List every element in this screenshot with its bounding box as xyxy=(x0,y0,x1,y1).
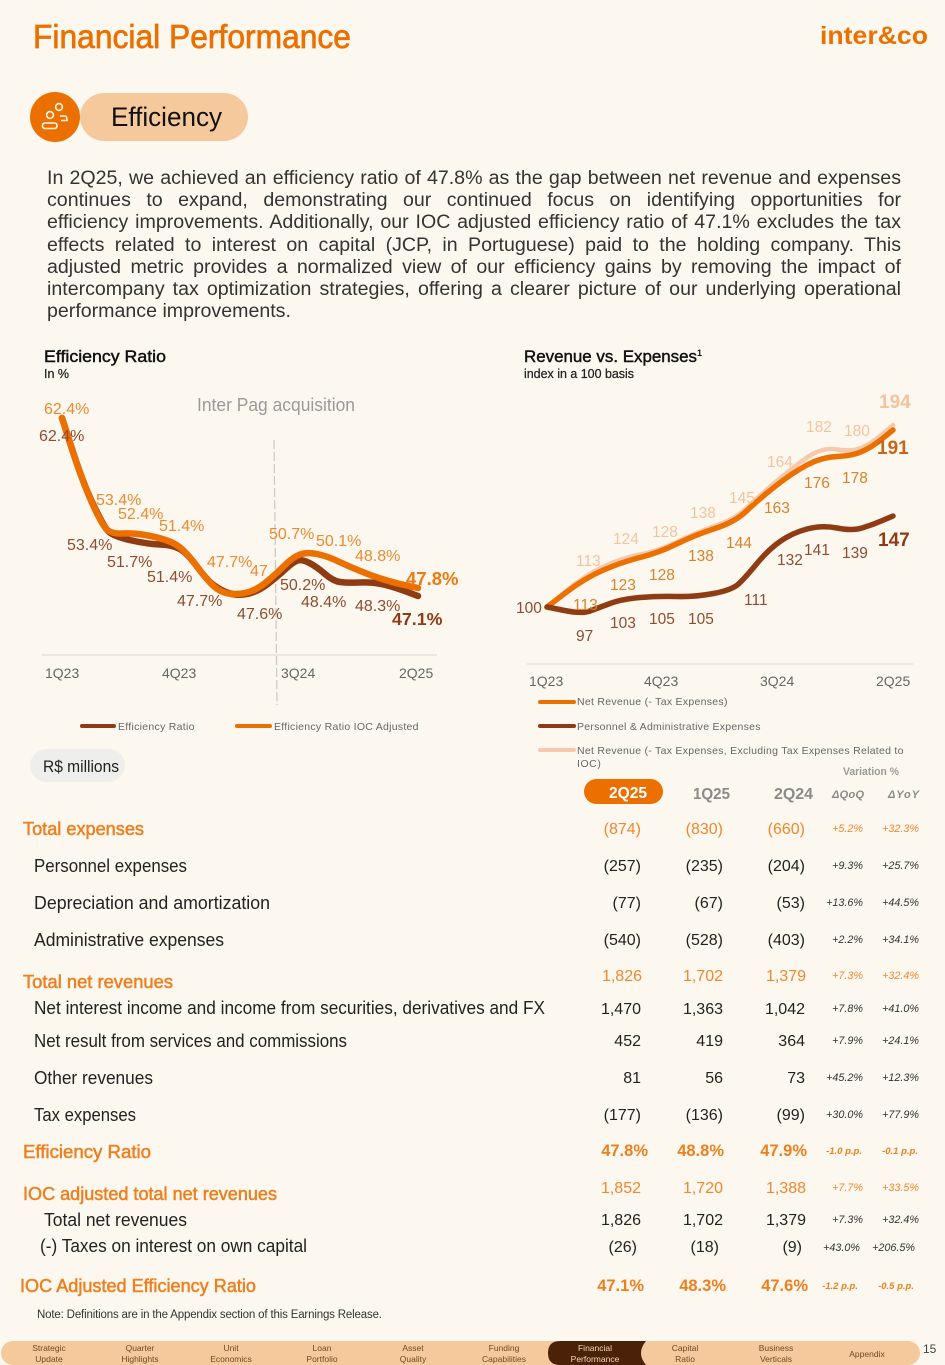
panel: revenue vs expenses chart xyxy=(516,347,913,770)
row: depreciation and amortization xyxy=(34,893,919,913)
data labels: IOC adjusted xyxy=(44,401,458,589)
legend: Efficiency Ratio IOC Adjusted xyxy=(274,721,419,733)
navigation bar: Capabilities xyxy=(482,1354,526,1364)
page number: 15 xyxy=(923,1342,937,1356)
legend xyxy=(540,696,904,770)
data labels: net revenue excluding IOC tax: 124 xyxy=(613,531,639,548)
row: total expenses: (660) xyxy=(768,821,805,838)
data labels: efficiency ratio: 48.3% xyxy=(355,598,400,615)
row: efficiency ratio: -1.0 p.p. xyxy=(826,1146,862,1157)
row: net result from services: +24.1% xyxy=(882,1035,919,1047)
row: administrative expenses xyxy=(34,930,919,950)
line: net revenue excluding IOC tax xyxy=(547,425,893,607)
row: IOC adjusted total net revenues: 1,852 xyxy=(601,1180,641,1197)
data labels: expenses: 100 xyxy=(516,600,542,617)
row: other revenues: 56 xyxy=(705,1070,723,1087)
x axis labels: 1Q23 xyxy=(529,673,563,689)
data labels: efficiency ratio: 48.4% xyxy=(301,594,346,611)
table: financial rows xyxy=(20,819,919,1296)
intro paragraph xyxy=(47,167,901,322)
row: personnel expenses xyxy=(34,856,919,876)
data labels: efficiency ratio: 51.7% xyxy=(107,554,152,571)
row: IOC adjusted efficiency ratio: 48.3% xyxy=(679,1277,726,1295)
intro paragraph: intercompany tax optimization strategies, offering a clearer picture of our underlying operational xyxy=(47,278,901,300)
row: administrative expenses: (540) xyxy=(604,932,641,949)
row: personnel expenses: (235) xyxy=(686,858,723,875)
row: net result from services xyxy=(34,1031,919,1051)
row: total expenses xyxy=(23,819,919,839)
row: IOC adjusted efficiency ratio: 47.1% xyxy=(597,1277,644,1295)
chart heading: Efficiency Ratio xyxy=(44,347,166,366)
row: IOC adjusted efficiency ratio: 47.6% xyxy=(761,1277,808,1295)
row: total net revenues: Total net revenues xyxy=(23,972,173,992)
data labels: efficiency ratio: 53.4% xyxy=(67,537,112,554)
row: IOC adjusted total net revenues: 1,388 xyxy=(766,1180,806,1197)
navigation bar: Quality xyxy=(400,1354,427,1364)
navigation bar xyxy=(1,1341,920,1365)
row: total net revenues sub-item xyxy=(44,1210,919,1230)
row: total net revenues: 1,826 xyxy=(602,968,642,985)
data labels: expenses: 139 xyxy=(842,545,868,562)
data labels: expenses: 132 xyxy=(777,552,803,569)
data labels: net revenue excluding IOC tax: 180 xyxy=(844,423,870,440)
data labels: efficiency ratio xyxy=(39,428,443,629)
row: tax expenses: (177) xyxy=(604,1107,641,1124)
data labels: net revenue: 176 xyxy=(804,475,830,492)
legend: Net Revenue (- Tax Expenses, Excluding Tax Expenses Related to xyxy=(577,745,904,757)
row: administrative expenses: (528) xyxy=(686,932,723,949)
data labels: efficiency ratio: 62.4% xyxy=(39,428,84,445)
data labels: net revenue: 191 xyxy=(877,438,909,459)
navigation bar: Economics xyxy=(210,1354,252,1364)
data labels: expenses: 105 xyxy=(649,611,675,628)
x axis labels: 2Q25 xyxy=(876,673,910,689)
row: efficiency ratio: Efficiency Ratio xyxy=(23,1142,151,1162)
row: taxes on interest on own capital: (18) xyxy=(691,1239,719,1256)
row: taxes on interest on own capital xyxy=(40,1236,915,1256)
row: depreciation and amortization: (53) xyxy=(777,895,805,912)
data labels: IOC adjusted: 47 xyxy=(250,563,268,580)
row: total net revenues sub-item: +32.4% xyxy=(882,1214,919,1226)
data labels: net revenue: 178 xyxy=(842,470,868,487)
row: tax expenses: +30.0% xyxy=(826,1109,863,1121)
x axis labels: 1Q23 xyxy=(45,665,79,681)
section badge: efficiency xyxy=(30,92,248,142)
row: net interest income: 1,042 xyxy=(765,1001,805,1018)
row: personnel expenses: (257) xyxy=(604,858,641,875)
row: tax expenses: (136) xyxy=(686,1107,723,1124)
row: total net revenues xyxy=(23,968,919,992)
data labels: efficiency ratio: 50.2% xyxy=(280,577,325,594)
row: tax expenses xyxy=(34,1105,919,1125)
row: IOC adjusted total net revenues: +7.7% xyxy=(832,1182,863,1194)
legend: Efficiency Ratio xyxy=(118,721,195,733)
table header: 1Q25 xyxy=(693,786,730,803)
row: IOC adjusted efficiency ratio xyxy=(20,1276,914,1296)
navigation bar: Appendix xyxy=(849,1349,885,1359)
data labels: expenses: 105 xyxy=(688,611,714,628)
navigation bar: Unit xyxy=(223,1343,239,1353)
row: efficiency ratio: 47.8% xyxy=(601,1142,648,1160)
row: total expenses: +32.3% xyxy=(882,823,919,835)
data labels: net revenue excluding IOC tax: 138 xyxy=(690,505,716,522)
data labels: expenses: 141 xyxy=(804,542,830,559)
row: efficiency ratio: 48.8% xyxy=(677,1142,724,1160)
data labels: IOC adjusted: 51.4% xyxy=(159,518,204,535)
navigation bar: Verticals xyxy=(760,1354,792,1364)
data labels: net revenue: 113 xyxy=(573,597,598,614)
title: Financial Performance xyxy=(33,18,351,55)
table header: ΔQoQ xyxy=(831,789,864,801)
row: net result from services: +7.9% xyxy=(832,1035,863,1047)
data labels: net revenue excluding IOC tax: 145 xyxy=(729,490,755,507)
icon: people xyxy=(30,92,80,142)
row: net result from services: 364 xyxy=(778,1033,805,1050)
table header: 2Q24 xyxy=(774,786,813,803)
x axis labels xyxy=(529,673,910,689)
table header: ΔYoY xyxy=(887,789,921,801)
row: other revenues: +12.3% xyxy=(882,1072,919,1084)
data labels: expenses: 103 xyxy=(610,615,636,632)
navigation bar: Portfolio xyxy=(306,1354,338,1364)
navigation bar: Ratio xyxy=(675,1354,695,1364)
table header xyxy=(584,766,921,804)
row: depreciation and amortization: (67) xyxy=(695,895,723,912)
row: total net revenues: 1,702 xyxy=(683,968,723,985)
row: administrative expenses: +2.2% xyxy=(832,934,863,946)
row: tax expenses: Tax expenses xyxy=(34,1105,136,1125)
row: taxes on interest on own capital: (26) xyxy=(609,1239,637,1256)
legend: IOC) xyxy=(577,758,601,770)
footnote: Note: Definitions are in the Appendix section of this Earnings Release. xyxy=(37,1309,382,1321)
row: other revenues xyxy=(34,1068,919,1088)
data labels: net revenue: 128 xyxy=(649,567,675,584)
navigation bar: Business xyxy=(759,1343,793,1353)
x axis labels: 3Q24 xyxy=(281,665,315,681)
active tab xyxy=(548,1341,646,1365)
row: total expenses: +5.2% xyxy=(832,823,863,835)
currency pill: R$ millions: R$ millions xyxy=(43,757,119,776)
row: personnel expenses: (204) xyxy=(768,858,805,875)
logo: inter&co: inter&co xyxy=(820,22,928,50)
data labels: net revenue: 123 xyxy=(610,577,636,594)
data labels: net revenue excluding IOC tax xyxy=(576,392,911,570)
row: IOC adjusted total net revenues: IOC adjusted total net revenues xyxy=(23,1184,277,1204)
variation heading: Variation % xyxy=(843,766,899,778)
currency pill: R$ millions xyxy=(30,749,125,782)
row: depreciation and amortization: +44.5% xyxy=(882,897,919,909)
active period pill xyxy=(584,779,663,804)
line: personnel and administrative expenses xyxy=(547,516,893,612)
legend: Personnel & Administrative Expenses xyxy=(577,721,761,733)
row: net interest income: Net interest income and income from securities, derivatives and FX xyxy=(34,998,545,1018)
row: total net revenues: 1,379 xyxy=(766,968,806,985)
row: other revenues: Other revenues xyxy=(34,1068,153,1088)
data labels: IOC adjusted: 50.1% xyxy=(316,533,361,550)
data labels: net revenue xyxy=(573,438,909,614)
row: IOC adjusted efficiency ratio: IOC Adjusted Efficiency Ratio xyxy=(20,1276,256,1296)
data labels: IOC adjusted: 50.7% xyxy=(269,526,314,543)
intro paragraph: continues to expand, demonstrating our continued focus on identifying opportunities for xyxy=(47,189,901,211)
row: efficiency ratio: 47.9% xyxy=(760,1142,807,1160)
data labels: expenses xyxy=(516,530,910,645)
row: IOC adjusted total net revenues: +33.5% xyxy=(882,1182,919,1194)
row: IOC adjusted total net revenues xyxy=(23,1180,919,1204)
intro paragraph: efficiency improvements. Additionally, our IOC adjusted efficiency ratio of 47.1% excludes the tax xyxy=(47,211,901,233)
data labels: efficiency ratio: 47.1% xyxy=(392,609,443,629)
row: total net revenues sub-item: Total net revenues xyxy=(44,1210,187,1230)
navigation bar: Funding xyxy=(489,1343,520,1353)
row: net interest income xyxy=(34,998,919,1018)
intro paragraph: effects related to interest on capital (JCP, in Portuguese) paid to the holding company. This xyxy=(47,234,901,256)
chart subheading: index in a 100 basis xyxy=(524,367,634,381)
row: administrative expenses: +34.1% xyxy=(882,934,919,946)
data labels: net revenue excluding IOC tax: 182 xyxy=(806,419,832,436)
data labels: net revenue: 163 xyxy=(764,500,790,517)
navigation bar: Strategic xyxy=(32,1343,67,1353)
row: total expenses: Total expenses xyxy=(23,819,144,839)
row: total net revenues: +32.4% xyxy=(882,970,919,982)
row: net result from services: 419 xyxy=(696,1033,723,1050)
panel: revenue vs expenses chart: 1 xyxy=(697,348,702,358)
row: net result from services: Net result from services and commissions xyxy=(34,1031,347,1051)
legend xyxy=(82,721,419,733)
chart subheading: In % xyxy=(44,367,69,381)
data labels: IOC adjusted: 53.4% xyxy=(96,492,141,509)
data labels: efficiency ratio: 47.6% xyxy=(237,606,282,623)
row: taxes on interest on own capital: +206.5% xyxy=(872,1242,915,1254)
chart heading: Revenue vs. Expenses xyxy=(524,347,697,366)
row: taxes on interest on own capital: (-) Taxes on interest on own capital xyxy=(40,1236,307,1256)
data labels: net revenue excluding IOC tax: 194 xyxy=(879,392,911,413)
line: efficiency ratio xyxy=(62,418,418,596)
data labels: net revenue: 144 xyxy=(726,535,752,552)
row: total expenses: (830) xyxy=(686,821,723,838)
data labels: IOC adjusted: 62.4% xyxy=(44,401,89,418)
x axis labels: 4Q23 xyxy=(162,665,196,681)
navigation bar: Update xyxy=(35,1354,63,1364)
row: total net revenues sub-item: 1,826 xyxy=(601,1212,641,1229)
row: total net revenues: +7.3% xyxy=(832,970,863,982)
data labels: expenses: 147 xyxy=(878,530,910,551)
row: taxes on interest on own capital: +43.0% xyxy=(823,1242,860,1254)
row: tax expenses: (99) xyxy=(777,1107,805,1124)
heading pill xyxy=(80,93,248,141)
intro paragraph: In 2Q25, we achieved an efficiency ratio of 47.8% as the gap between net revenue and expenses xyxy=(47,167,901,189)
row: efficiency ratio xyxy=(23,1142,918,1162)
row: administrative expenses: Administrative expenses xyxy=(34,930,224,950)
data labels: efficiency ratio: 47.7% xyxy=(177,593,222,610)
data labels: expenses: 111 xyxy=(744,592,768,609)
navigation bar: Capital xyxy=(672,1343,698,1353)
row: net interest income: +7.8% xyxy=(832,1003,863,1015)
table header: 2Q25 xyxy=(609,785,647,802)
row: tax expenses: +77.9% xyxy=(882,1109,919,1121)
row: depreciation and amortization: +13.6% xyxy=(826,897,863,909)
row: efficiency ratio: -0.1 p.p. xyxy=(882,1146,918,1157)
row: personnel expenses: Personnel expenses xyxy=(34,856,187,876)
row: IOC adjusted efficiency ratio: -1.2 p.p. xyxy=(822,1281,858,1292)
navigation bar: Asset xyxy=(402,1343,424,1353)
row: total net revenues sub-item: +7.3% xyxy=(832,1214,863,1226)
navigation bar: Performance xyxy=(571,1354,620,1364)
data labels: net revenue excluding IOC tax: 164 xyxy=(767,454,793,471)
navigation bar: Financial xyxy=(578,1343,612,1353)
intro paragraph: performance improvements. xyxy=(47,300,291,322)
data labels: net revenue: 138 xyxy=(688,548,714,565)
data labels: IOC adjusted: 47.8% xyxy=(406,568,458,589)
data labels: net revenue excluding IOC tax: 113 xyxy=(576,553,601,570)
row: total net revenues sub-item: 1,379 xyxy=(766,1212,806,1229)
row: net interest income: +41.0% xyxy=(882,1003,919,1015)
row: personnel expenses: +9.3% xyxy=(832,860,863,872)
navigation bar: Quarter xyxy=(126,1343,155,1353)
row: personnel expenses: +25.7% xyxy=(882,860,919,872)
row: depreciation and amortization: Depreciation and amortization xyxy=(34,893,270,913)
row: other revenues: 73 xyxy=(787,1070,805,1087)
x axis labels: 2Q25 xyxy=(399,665,433,681)
heading text: Efficiency xyxy=(111,102,222,132)
legend: Net Revenue (- Tax Expenses) xyxy=(577,696,728,708)
row: depreciation and amortization: (77) xyxy=(613,895,641,912)
data labels: net revenue excluding IOC tax: 128 xyxy=(652,524,678,541)
annotation: Inter Pag acquisition: Inter Pag acquisition xyxy=(197,394,355,415)
row: IOC adjusted efficiency ratio: -0.5 p.p. xyxy=(878,1281,914,1292)
data labels: IOC adjusted: 52.4% xyxy=(118,506,163,523)
data labels: efficiency ratio: 51.4% xyxy=(147,569,192,586)
x axis labels xyxy=(45,665,433,681)
x axis labels: 3Q24 xyxy=(760,673,794,689)
row: IOC adjusted total net revenues: 1,720 xyxy=(683,1180,723,1197)
row: net result from services: 452 xyxy=(614,1033,641,1050)
navigation bar: Highlights xyxy=(121,1354,159,1364)
x axis labels: 4Q23 xyxy=(644,673,678,689)
intro paragraph: adjusted metric provides a normalized view of our efficiency gains by removing the impact of xyxy=(47,256,901,278)
panel: efficiency ratio chart xyxy=(39,347,458,733)
row: net interest income: 1,363 xyxy=(683,1001,723,1018)
row: net interest income: 1,470 xyxy=(601,1001,641,1018)
row: total net revenues sub-item: 1,702 xyxy=(683,1212,723,1229)
line: efficiency ratio IOC adjusted xyxy=(62,418,418,594)
navigation bar: Loan xyxy=(313,1343,332,1353)
row: total expenses: (874) xyxy=(604,821,641,838)
row: administrative expenses: (403) xyxy=(768,932,805,949)
row: other revenues: 81 xyxy=(623,1070,641,1087)
data labels: expenses: 97 xyxy=(576,628,593,645)
row: taxes on interest on own capital: (9) xyxy=(782,1239,802,1256)
line: net revenue xyxy=(547,430,893,607)
data labels: IOC adjusted: 48.8% xyxy=(355,548,400,565)
row: other revenues: +45.2% xyxy=(826,1072,863,1084)
data labels: IOC adjusted: 47.7% xyxy=(207,554,252,571)
